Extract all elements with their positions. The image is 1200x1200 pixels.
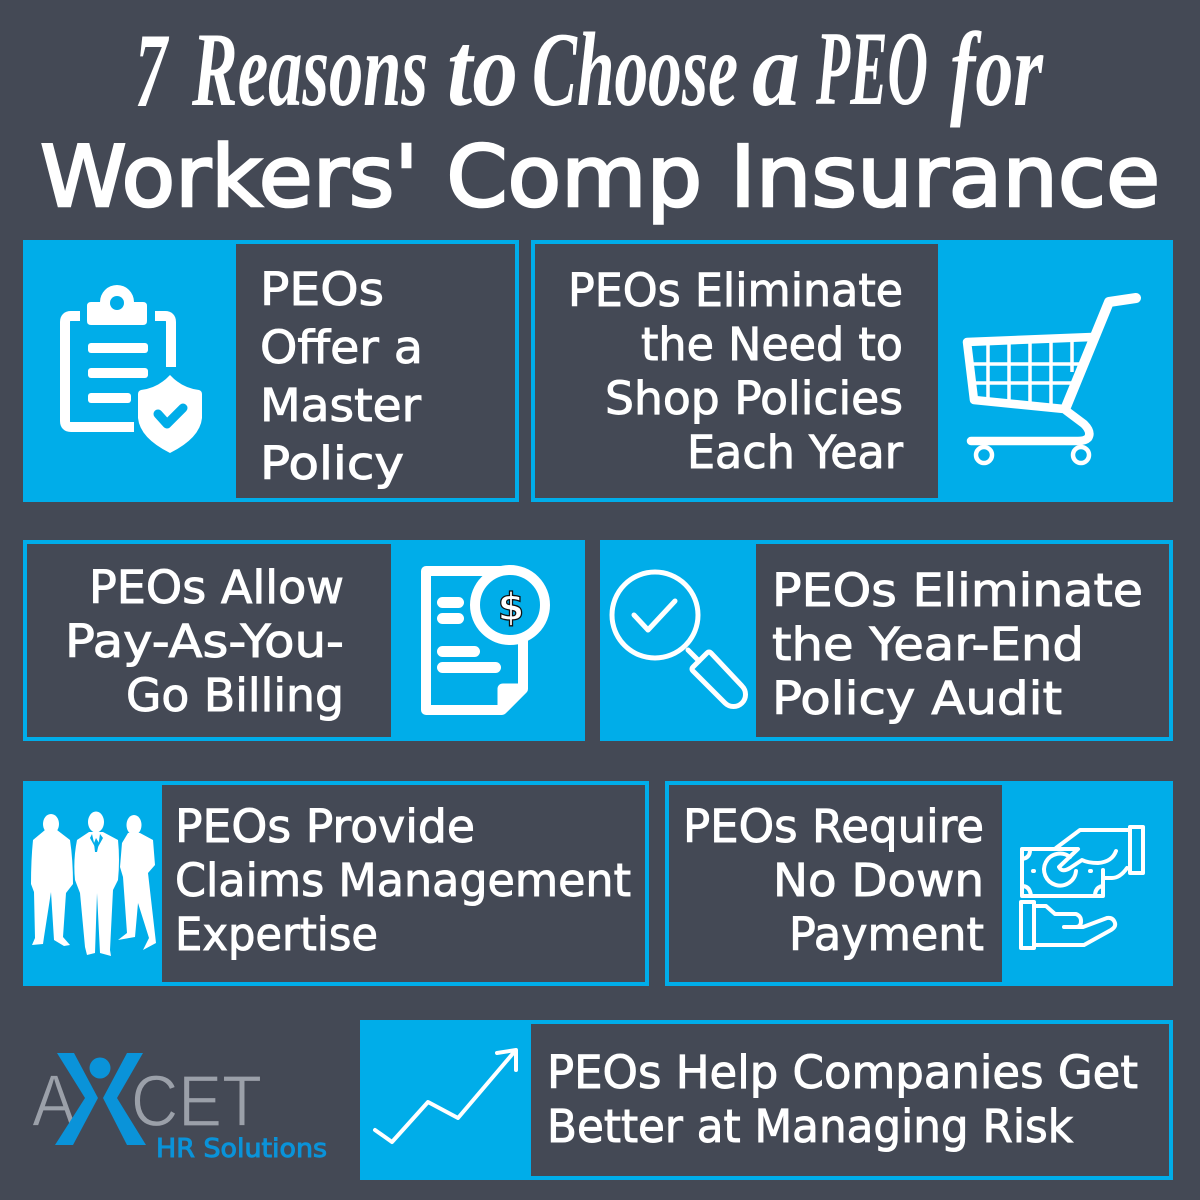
- icon: rising trend arrow: [375, 1050, 516, 1142]
- script heading line: a: [752, 11, 800, 128]
- panel text: Payment: [789, 908, 984, 961]
- script heading line: to: [447, 11, 518, 128]
- panel: no shopping: [531, 240, 1173, 502]
- panel text: PEOs Eliminate: [772, 564, 1143, 617]
- script heading line: PEO: [815, 10, 928, 127]
- panel text: PEOs: [260, 263, 384, 316]
- panel text: PEOs Require: [683, 800, 984, 853]
- panel text: PEOs Allow: [89, 561, 344, 614]
- script heading line: Reasons: [191, 11, 428, 128]
- script heading line: 7: [135, 12, 169, 129]
- panel text: Pay-As-You-: [65, 615, 344, 668]
- panel text: [260, 263, 423, 490]
- panel: claims management: [23, 781, 649, 986]
- panel text: Better at Managing Risk: [547, 1100, 1073, 1153]
- panel text: [568, 264, 903, 479]
- bold heading line: Workers' Comp Insurance: [40, 128, 1160, 227]
- icon: invoice with dollar: [426, 570, 545, 711]
- panel text: No Down: [773, 854, 984, 907]
- logo: Axcet HR Solutions: A: [32, 1061, 76, 1142]
- panel: master policy: [23, 240, 519, 502]
- logo: Axcet HR Solutions: [32, 1053, 327, 1164]
- script heading line: for: [950, 11, 1044, 128]
- script heading line: [135, 10, 1044, 129]
- icon: invoice with dollar: $: [498, 585, 524, 629]
- panel text: PEOs Eliminate: [568, 264, 903, 317]
- panel text: [683, 800, 984, 961]
- panel text: Go Billing: [126, 669, 344, 722]
- panel text: PEOs Help Companies Get: [547, 1046, 1138, 1099]
- title: [40, 10, 1160, 227]
- logo: Axcet HR Solutions: CET: [131, 1062, 262, 1142]
- logo: Axcet HR Solutions: HR Solutions: [156, 1134, 327, 1164]
- panel text: Policy Audit: [772, 672, 1062, 725]
- icon: shopping cart: [967, 298, 1136, 463]
- panel text: [65, 561, 344, 722]
- panel text: [175, 800, 631, 961]
- panel text: Claims Management: [175, 854, 631, 907]
- icon: hands exchanging money: [1021, 827, 1143, 948]
- panel: no down payment: [665, 781, 1173, 986]
- panel text: the Year-End: [772, 618, 1084, 671]
- panel text: PEOs Provide: [175, 800, 475, 853]
- panel text: Expertise: [175, 908, 378, 961]
- icon: magnifier with check: [612, 572, 746, 707]
- panel text: [772, 564, 1143, 725]
- panel text: Offer a: [260, 321, 423, 374]
- panel text: Master: [260, 379, 422, 432]
- panel text: Shop Policies: [605, 372, 903, 425]
- panel: pay-as-you-go: [23, 540, 585, 741]
- panel text: [547, 1046, 1138, 1153]
- panel: no audit: [600, 540, 1173, 741]
- icon: three business people: [31, 812, 156, 956]
- script heading line: Choose: [532, 11, 738, 128]
- panel: managing risk: [360, 1020, 1173, 1180]
- panel text: Policy: [260, 437, 404, 490]
- panel text: the Need to: [641, 318, 903, 371]
- icon: clipboard with shield: [65, 285, 202, 453]
- panel text: Each Year: [687, 426, 903, 479]
